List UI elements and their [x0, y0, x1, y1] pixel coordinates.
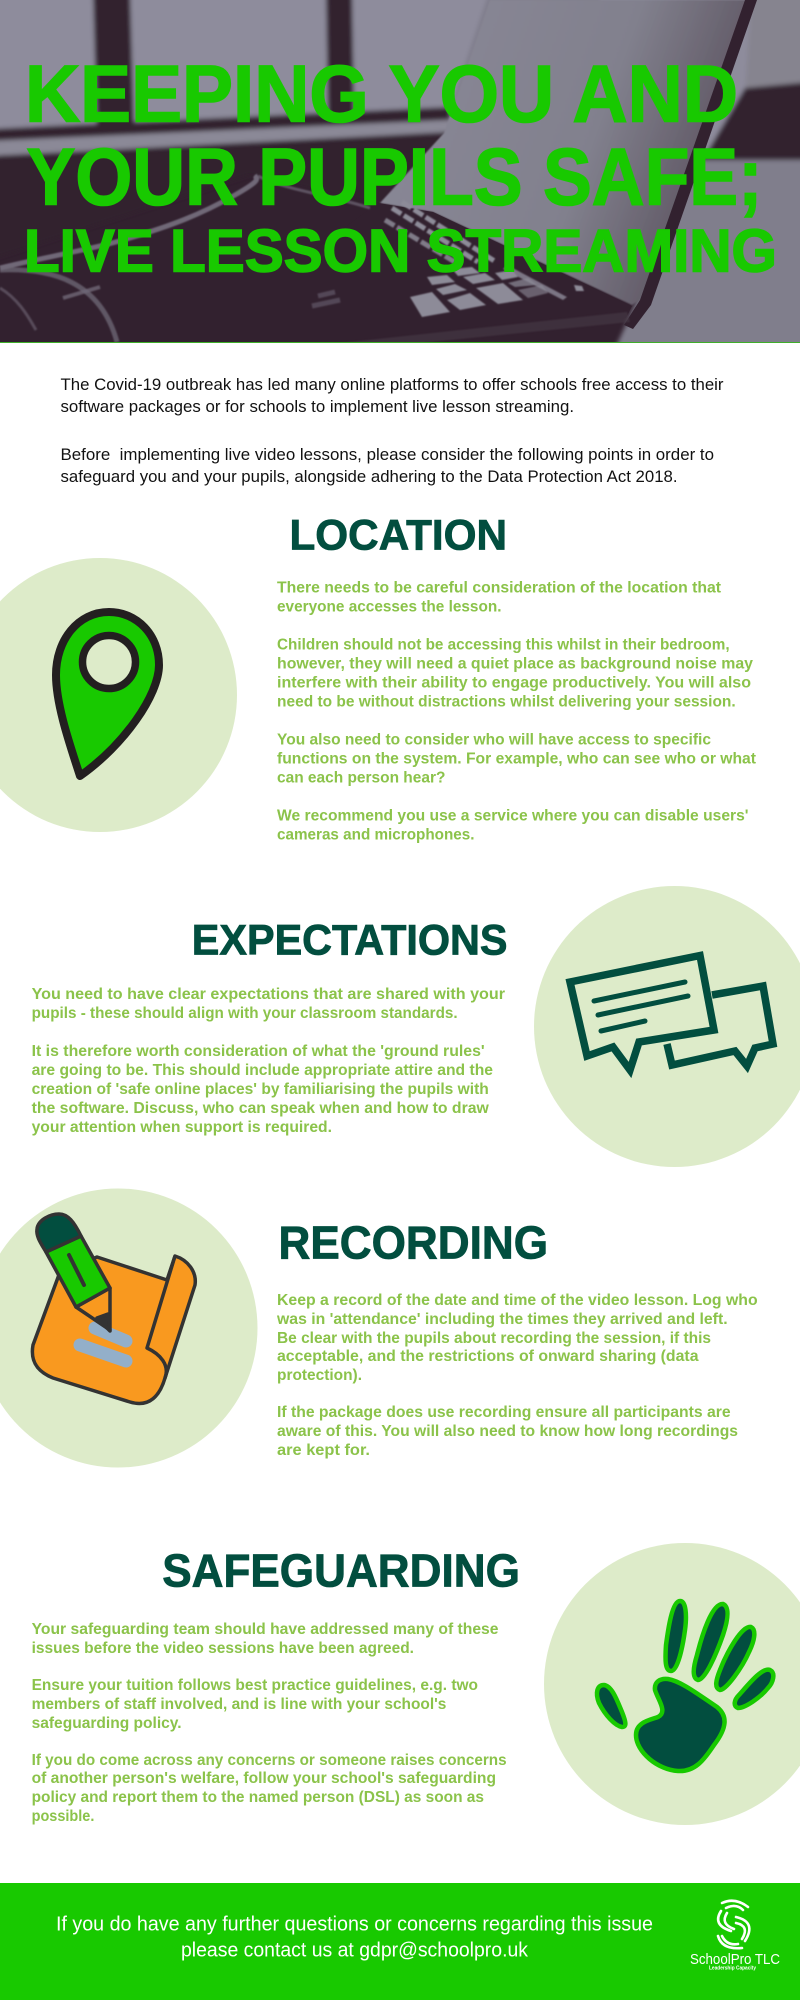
location text: We recommend you use a service where you can disable users': [277, 808, 748, 825]
safeguarding heading: SAFEGUARDING: [162, 1544, 520, 1596]
expectations text: It is therefore worth consideration of what the 'ground rules': [32, 1043, 485, 1060]
expectations text: are going to be. This should include appropriate attire and the: [32, 1062, 493, 1079]
panel: location: [0, 512, 756, 844]
recording text: [276, 1292, 758, 1459]
expectations heading: EXPECTATIONS: [192, 916, 508, 964]
location text: can each person hear?: [277, 770, 445, 787]
icon: speech bubbles: [570, 956, 773, 1070]
keyboard keys: [410, 265, 584, 317]
location text: You also need to consider who will have access to specific: [277, 732, 711, 749]
location text: interfere with their ability to engage productively. You will also: [277, 675, 751, 692]
icon: scroll and pencil: [32, 1214, 195, 1403]
recording circle: [0, 1188, 258, 1468]
intro text: Before implementing live video lessons, please consider the following points in order to: [60, 446, 714, 464]
safeguarding circle: [544, 1543, 800, 1825]
recording text: Keep a record of the date and time of the video lesson. Log who: [277, 1292, 758, 1309]
recording text: protection).: [277, 1367, 362, 1384]
safeguarding text: Your safeguarding team should have addressed many of these: [32, 1621, 499, 1638]
panel: expectations: [32, 886, 800, 1167]
footer contact text: If you do have any further questions or concerns regarding this issue: [56, 1913, 653, 1936]
safeguarding text: Ensure your tuition follows best practice guidelines, e.g. two: [32, 1677, 478, 1694]
location text: however, they will need a quiet place as background noise may: [277, 656, 753, 673]
blurred strap and wheel in foreground: [0, 176, 370, 342]
safeguarding text: members of staff involved, and is line with your school's: [32, 1696, 446, 1713]
panel: safeguarding: [32, 1543, 800, 1825]
recording text: Be clear with the pupils about recording the session, if this: [277, 1330, 711, 1347]
location text: cameras and microphones.: [277, 827, 474, 844]
location circle: [0, 558, 237, 832]
header banner: [0, 0, 800, 360]
title: [24, 50, 777, 284]
expectations text: pupils - these should align with your classroom standards.: [32, 1005, 458, 1022]
intro text: software packages or for schools to implement live lesson streaming.: [60, 398, 574, 416]
expectations text: You need to have clear expectations that are shared with your: [32, 986, 505, 1003]
header photo: laptop on a desk: [0, 0, 800, 360]
location text: everyone accesses the lesson.: [277, 599, 502, 616]
expectations circle: [534, 886, 800, 1167]
recording heading: RECORDING: [278, 1216, 548, 1268]
logo: SchoolPro TLC: Leadership Capacity: [709, 1966, 756, 1972]
location text: [277, 580, 756, 844]
expectations text: [32, 986, 505, 1136]
location text: need to be without distractions whilst delivering your session.: [277, 694, 736, 711]
safeguarding text: If you do come across any concerns or someone raises concerns: [32, 1752, 507, 1769]
footer contact text: please contact us at gdpr@schoolpro.uk: [181, 1939, 529, 1962]
safeguarding text: safeguarding policy.: [32, 1715, 182, 1732]
recording text: aware of this. You will also need to know how long recordings: [277, 1423, 738, 1440]
recording text: was in 'attendance' including the times they arrived and left.: [276, 1311, 728, 1328]
footer contact text: [56, 1913, 653, 1962]
logo: SchoolPro TLC: SchoolPro TLC: [690, 1952, 780, 1968]
location heading: LOCATION: [290, 512, 507, 560]
intro text: [60, 376, 724, 486]
safeguarding text: of another person's welfare, follow your school's safeguarding: [32, 1770, 496, 1787]
intro text: safeguard you and your pupils, alongside adhering to the Data Protection Act 2018.: [60, 468, 678, 486]
location text: functions on the system. For example, who can see who or what: [277, 751, 756, 768]
recording text: If the package does use recording ensure all participants are: [277, 1404, 731, 1421]
safeguarding text: issues before the video sessions have been agreed.: [32, 1640, 414, 1657]
panel: recording: [0, 1188, 758, 1468]
title: KEEPING YOU AND: [25, 50, 738, 140]
intro text: The Covid-19 outbreak has led many online platforms to offer schools free access to their: [60, 376, 724, 394]
icon: map pin: [56, 612, 159, 776]
footer band: [0, 1883, 800, 2000]
expectations text: your attention when support is required.: [32, 1119, 332, 1136]
expectations text: the software. Discuss, who can speak when and how to draw: [32, 1100, 490, 1117]
location text: There needs to be careful consideration of the location that: [277, 580, 721, 597]
location text: Children should not be accessing this whilst in their bedroom,: [277, 637, 730, 654]
safeguarding text: policy and report them to the named person (DSL) as soon as: [32, 1789, 484, 1806]
logo: SchoolPro TLC: [690, 1901, 780, 1972]
recording text: acceptable, and the restrictions of onward sharing (data: [277, 1348, 699, 1365]
recording text: are kept for.: [277, 1442, 370, 1459]
expectations text: creation of 'safe online places' by familiarising the pupils with: [32, 1081, 489, 1098]
title: LIVE LESSON STREAMING: [24, 216, 777, 284]
safeguarding text: possible.: [32, 1808, 94, 1825]
icon: hand print: [597, 1601, 773, 1771]
safeguarding text: [32, 1621, 507, 1825]
